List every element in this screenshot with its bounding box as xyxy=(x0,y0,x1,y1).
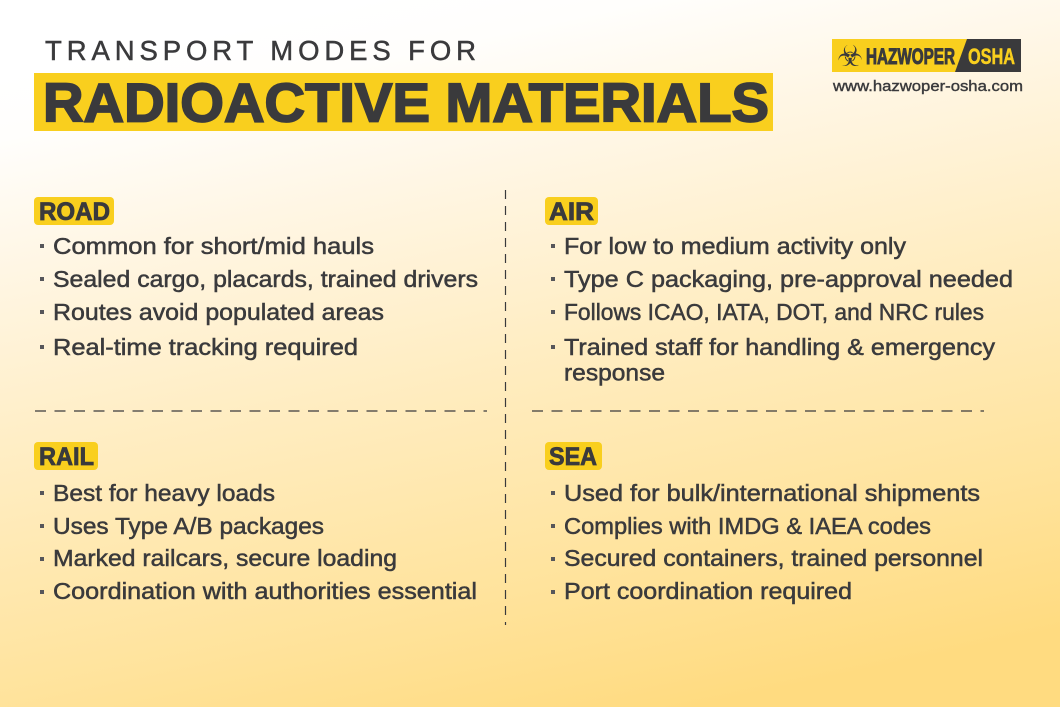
road bullet list: Routes avoid populated areas xyxy=(53,299,384,325)
air heading: AIR xyxy=(549,198,594,226)
panel: air xyxy=(545,197,1013,386)
air bullet list: response xyxy=(564,360,665,386)
road bullet list xyxy=(40,233,478,360)
road bullet list: Sealed cargo, placards, trained drivers xyxy=(53,266,478,292)
rail bullet list xyxy=(40,480,477,604)
logo badge: OSHA xyxy=(968,44,1015,69)
panel: road xyxy=(34,197,478,360)
rail bullet list: Uses Type A/B packages xyxy=(53,513,324,539)
title banner: RADIOACTIVE MATERIALS xyxy=(43,72,769,134)
road bullet list: Real-time tracking required xyxy=(53,334,358,360)
road bullet list: Common for short/mid hauls xyxy=(53,233,374,259)
sea bullet list: Complies with IMDG & IAEA codes xyxy=(564,513,931,539)
title xyxy=(34,35,773,134)
rail heading: RAIL xyxy=(39,443,94,471)
rail bullet list: Coordination with authorities essential xyxy=(53,578,477,604)
panel: rail xyxy=(34,442,477,604)
rail bullet list: Best for heavy loads xyxy=(53,480,275,506)
air bullet list: For low to medium activity only xyxy=(564,233,907,259)
sea bullet list: Port coordination required xyxy=(564,578,852,604)
air bullet list: Trained staff for handling & emergency xyxy=(564,334,996,360)
logo url: www.hazwoper-osha.com xyxy=(832,78,1023,95)
road heading: ROAD xyxy=(39,198,110,226)
panel: sea xyxy=(545,442,983,604)
sea heading: SEA xyxy=(549,443,597,471)
air bullet list: Type C packaging, pre-approval needed xyxy=(564,266,1013,292)
logo xyxy=(832,39,1023,95)
air bullet list: Follows ICAO, IATA, DOT, and NRC rules xyxy=(564,299,984,325)
air bullet list xyxy=(551,233,1013,386)
logo badge: HAZWOPER xyxy=(866,44,955,69)
dividers xyxy=(35,190,984,625)
logo badge xyxy=(832,39,1021,73)
sea bullet list xyxy=(551,480,983,604)
rail bullet list: Marked railcars, secure loading xyxy=(53,545,397,571)
title: first line: TRANSPORT MODES FOR xyxy=(45,35,476,66)
sea bullet list: Secured containers, trained personnel xyxy=(564,545,983,571)
sea bullet list: Used for bulk/international shipments xyxy=(564,480,980,506)
logo badge: ☣ xyxy=(837,39,863,73)
